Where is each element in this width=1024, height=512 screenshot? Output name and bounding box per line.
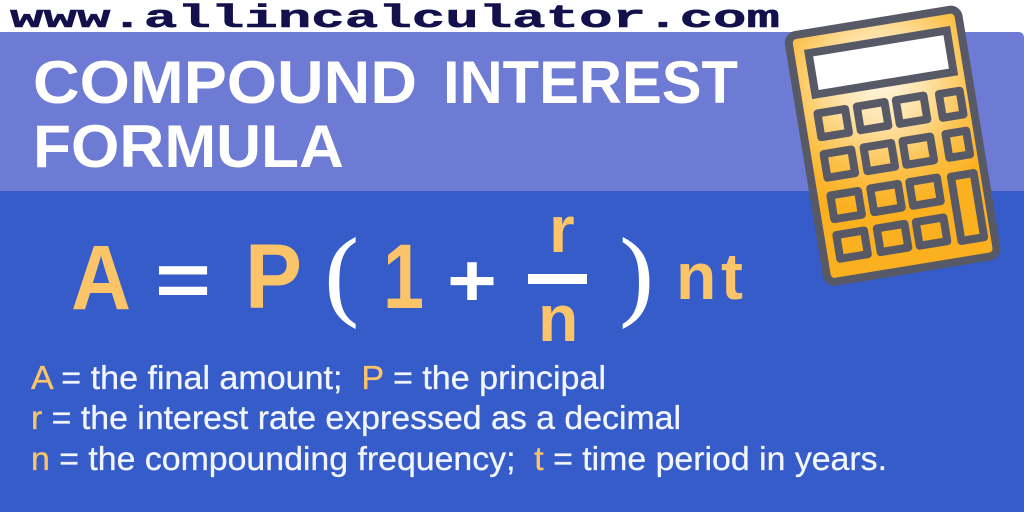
heading <box>33 49 738 180</box>
legend <box>31 359 887 477</box>
heading word: interest: INTEREST <box>443 49 738 116</box>
exponent nt: nt <box>676 239 743 313</box>
fraction bar <box>528 274 587 284</box>
denominator n: n <box>538 281 578 355</box>
plus sign: + <box>447 239 497 322</box>
right parenthesis: ) <box>620 218 653 329</box>
panel: header background <box>0 32 1024 191</box>
website url: www.allincalculator.com <box>10 0 780 37</box>
calculator keys <box>816 90 984 261</box>
A symbol: A <box>71 227 131 329</box>
numerator r: r <box>549 192 575 266</box>
icon: calculator <box>788 9 998 283</box>
calculator body <box>788 9 998 283</box>
legend line: r: r = the interest rate expressed as a decimal <box>31 399 681 436</box>
heading word: formula: FORMULA <box>33 113 344 180</box>
legend line: n and t: n = the compounding frequency; t = time period in years. <box>31 440 887 477</box>
equals sign: = <box>155 238 211 323</box>
left parenthesis: ( <box>325 218 358 329</box>
calculator display <box>809 31 954 95</box>
legend line: A and P: A = the final amount; P = the principal <box>31 359 606 396</box>
heading word: compound: COMPOUND <box>33 49 417 116</box>
formula <box>71 192 743 355</box>
numeral one: 1 <box>383 226 424 328</box>
P symbol: P <box>245 226 302 328</box>
panel: body background <box>0 191 1024 512</box>
